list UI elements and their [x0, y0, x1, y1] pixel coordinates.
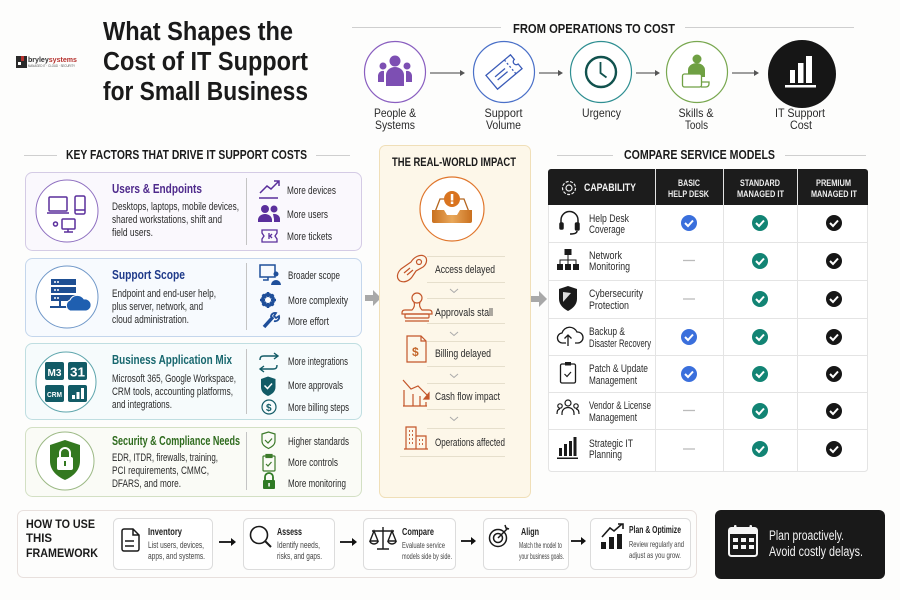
step: skills and tools: Tools: [685, 118, 708, 132]
panel: support scope: Support Scope: [112, 267, 185, 282]
heading: how to use: HOW TO USE: [26, 517, 95, 531]
panel: the real-world impact: Access delayed: [435, 264, 495, 276]
panel: support scope: More effort: [288, 316, 329, 328]
icon: inbox alert: [420, 177, 484, 241]
panel: the real-world impact: [380, 146, 530, 498]
row: patch and update management: Patch & Update: [589, 363, 648, 375]
callout: plan proactively: Plan proactively.: [769, 528, 844, 543]
row: help desk coverage: Coverage: [589, 224, 625, 236]
row: patch and update management: Management: [589, 375, 637, 387]
row: strategic it planning: [557, 437, 842, 461]
icon: server and cloud: [36, 266, 98, 328]
table header: [562, 178, 857, 200]
title: [103, 18, 308, 106]
icon: cash flow chart: [403, 380, 429, 406]
table header: MANAGED IT: [811, 189, 857, 200]
panel: support scope: plus server, network, and: [112, 301, 203, 313]
step: support volume: Support: [484, 106, 523, 120]
step: compare: models side by side.: [402, 552, 452, 561]
panel: business application mix: More approvals: [288, 380, 343, 392]
step: it support cost: Cost: [790, 118, 813, 132]
icon: devices: [36, 180, 98, 242]
table header: PREMIUM: [816, 178, 851, 189]
panel: business application mix: More integrations: [288, 356, 348, 368]
step: support volume: [474, 42, 534, 132]
row: network monitoring: [557, 249, 842, 273]
row: cybersecurity protection: Protection: [589, 300, 629, 312]
step: assess: Assess: [277, 526, 302, 538]
panel: security and compliance needs: More monitoring: [288, 478, 346, 490]
heading: from operations to cost: FROM OPERATIONS TO COST: [513, 21, 675, 36]
title: for Small Business: [103, 78, 308, 106]
icon: applications: [36, 352, 96, 412]
icon: more controls: [263, 454, 275, 471]
row: strategic it planning: Planning: [589, 449, 622, 461]
row: vendor and license management: [557, 400, 842, 424]
table header: CAPABILITY: [584, 182, 637, 194]
step: skills and tools: Skills &: [678, 106, 714, 120]
row: cybersecurity protection: Cybersecurity: [589, 288, 643, 300]
icon: applications: 31: [70, 364, 85, 380]
panel: support scope: Broader scope: [288, 270, 340, 282]
step: inventory: apps, and systems.: [148, 551, 205, 561]
panel: security and compliance needs: Higher standards: [288, 436, 349, 448]
logo: bryley systems: [16, 55, 77, 68]
panel: business application mix: and integrations.: [112, 399, 172, 411]
icon: broader scope: [260, 265, 281, 285]
row: backup and disaster recovery: Backup &: [589, 326, 625, 338]
row: strategic it planning: Strategic IT: [589, 438, 633, 450]
table header: HELP DESK: [668, 189, 709, 200]
icon: applications: M3: [48, 368, 62, 379]
step: urgency: Urgency: [582, 106, 621, 120]
heading: how to use: FRAMEWORK: [26, 546, 98, 560]
arrow: [430, 70, 465, 76]
panel: users and endpoints: Users & Endpoints: [112, 181, 202, 196]
row: patch and update management: [560, 362, 842, 387]
step: people and systems: People &: [374, 106, 416, 120]
logo: bryley systems: MANAGED IT · CLOUD · SECURITY: [28, 64, 75, 68]
panel: security and compliance needs: PCI requirements, CMMC,: [112, 465, 209, 477]
step: skills and tools: [666, 42, 728, 132]
step: align: Align: [521, 526, 539, 538]
panel: how to use this framework: [18, 510, 696, 578]
panel: users and endpoints: field users.: [112, 227, 153, 239]
step: assess: [244, 518, 334, 570]
step: align: [484, 518, 568, 570]
logo: bryley systems: bryleysystems: [28, 55, 77, 64]
panel: security and compliance needs: Security & Compliance Needs: [112, 433, 240, 448]
row: help desk coverage: [560, 212, 842, 236]
icon: more tickets: [262, 230, 277, 242]
panel: business application mix: CRM tools, accounting platforms,: [112, 386, 233, 398]
panel: security and compliance needs: DFARS, and more.: [112, 478, 181, 490]
icon: more approvals: [261, 376, 276, 396]
icon: more billing steps: $: [266, 403, 272, 414]
step: plan and optimize: adjust as you grow.: [629, 550, 681, 560]
panel: the real-world impact: Cash flow impact: [435, 391, 500, 403]
step: it support cost: IT Support: [775, 106, 826, 120]
step: inventory: List users, devices,: [148, 540, 204, 550]
callout: plan proactively: Avoid costly delays.: [769, 544, 863, 559]
panel: the real-world impact: Billing delayed: [435, 348, 491, 360]
icon: more complexity: [260, 292, 276, 308]
arrow: impact to service models: [531, 291, 547, 307]
icon: more effort: [264, 313, 279, 327]
step: align: your business goals.: [519, 552, 564, 561]
panel: users and endpoints: More devices: [287, 185, 336, 197]
table header: BASIC: [678, 178, 700, 189]
row: network monitoring: Network: [589, 250, 622, 262]
step: support volume: Volume: [486, 118, 521, 132]
step: assess: risks, and gaps.: [277, 551, 322, 561]
panel: the real-world impact: Operations affected: [435, 437, 505, 449]
arrow: [340, 538, 357, 546]
step: compare: [364, 518, 456, 570]
table header: STANDARD: [740, 178, 780, 189]
callout: plan proactively: [715, 510, 885, 579]
panel: business application mix: [26, 344, 362, 420]
icon: more monitoring: [263, 473, 275, 489]
panel: support scope: More complexity: [288, 295, 348, 307]
icon: calendar: [729, 525, 757, 556]
step: plan and optimize: [590, 518, 690, 570]
icon: stamp: [402, 293, 432, 321]
icon: more users: [258, 205, 280, 222]
arrow: [636, 70, 660, 76]
step: compare: Compare: [402, 526, 434, 538]
icon: invoice: [407, 336, 426, 362]
arrow: [732, 70, 759, 76]
icon: buildings: [404, 427, 428, 449]
panel: the real-world impact: THE REAL-WORLD IMPACT: [392, 157, 516, 169]
step: plan and optimize: Review regularly and: [629, 539, 684, 549]
table: service model comparison: [548, 169, 868, 472]
title: What Shapes the: [103, 18, 293, 46]
panel: support scope: cloud administration.: [112, 314, 189, 326]
panel: security and compliance needs: More controls: [288, 457, 338, 469]
step: inventory: Inventory: [148, 526, 182, 538]
row: help desk coverage: Help Desk: [589, 213, 629, 225]
step: assess: Identify needs,: [277, 540, 320, 550]
panel: users and endpoints: More tickets: [287, 231, 332, 243]
row: cybersecurity protection: [559, 286, 842, 312]
heading: how to use: [26, 517, 98, 560]
icon: applications: CRM: [47, 390, 62, 399]
row: vendor and license management: Management: [589, 412, 637, 424]
icon: more devices: [259, 181, 279, 198]
panel: the real-world impact: Approvals stall: [435, 307, 493, 319]
step: it support cost: [768, 40, 836, 132]
arrow: [571, 537, 586, 545]
step: compare: Evaluate service: [402, 541, 445, 550]
step: align: Match the model to: [519, 541, 562, 550]
arrow: [461, 537, 476, 545]
row: network monitoring: Monitoring: [589, 261, 630, 273]
panel: security and compliance needs: EDR, ITDR, firewalls, training,: [112, 452, 218, 464]
icon: shield lock: [36, 432, 94, 490]
arrow: [539, 70, 563, 76]
panel: users and endpoints: Desktops, laptops, mobile devices,: [112, 201, 239, 213]
table header: MANAGED IT: [737, 189, 784, 200]
step: plan and optimize: Plan & Optimize: [629, 524, 681, 536]
step: people and systems: [364, 42, 426, 132]
icon: more billing steps: [262, 400, 276, 414]
arrow: [219, 538, 236, 546]
step: people and systems: Systems: [375, 118, 415, 132]
icon: key: [397, 255, 427, 282]
heading: key factors: KEY FACTORS THAT DRIVE IT SUPPORT COSTS: [66, 148, 307, 162]
panel: business application mix: More billing steps: [288, 402, 349, 414]
row: backup and disaster recovery: Disaster Recovery: [589, 338, 651, 350]
arrow: factors to impact: [365, 290, 381, 306]
heading: how to use: THIS: [26, 531, 52, 545]
flow: operations to cost: [364, 40, 836, 132]
row: backup and disaster recovery: [557, 326, 842, 350]
icon: higher standards: [262, 432, 275, 448]
panel: support scope: [26, 258, 362, 336]
step: urgency: [570, 42, 632, 120]
panel: security and compliance needs: [26, 428, 362, 496]
heading: compare service models: COMPARE SERVICE MODELS: [624, 148, 775, 162]
panel: users and endpoints: More users: [287, 209, 328, 221]
row: vendor and license management: Vendor & License: [589, 400, 651, 412]
panel: users and endpoints: shared workstations, shift and: [112, 214, 222, 226]
panel: business application mix: Microsoft 365, Google Workspace,: [112, 373, 236, 385]
title: Cost of IT Support: [103, 48, 308, 76]
panel: business application mix: Business Application Mix: [112, 352, 233, 367]
step: inventory: [114, 518, 212, 570]
panel: users and endpoints: [26, 172, 362, 250]
panel: support scope: Endpoint and end-user help,: [112, 288, 216, 300]
panel: the real-world impact: $: [412, 345, 419, 359]
icon: more integrations: [260, 353, 278, 372]
